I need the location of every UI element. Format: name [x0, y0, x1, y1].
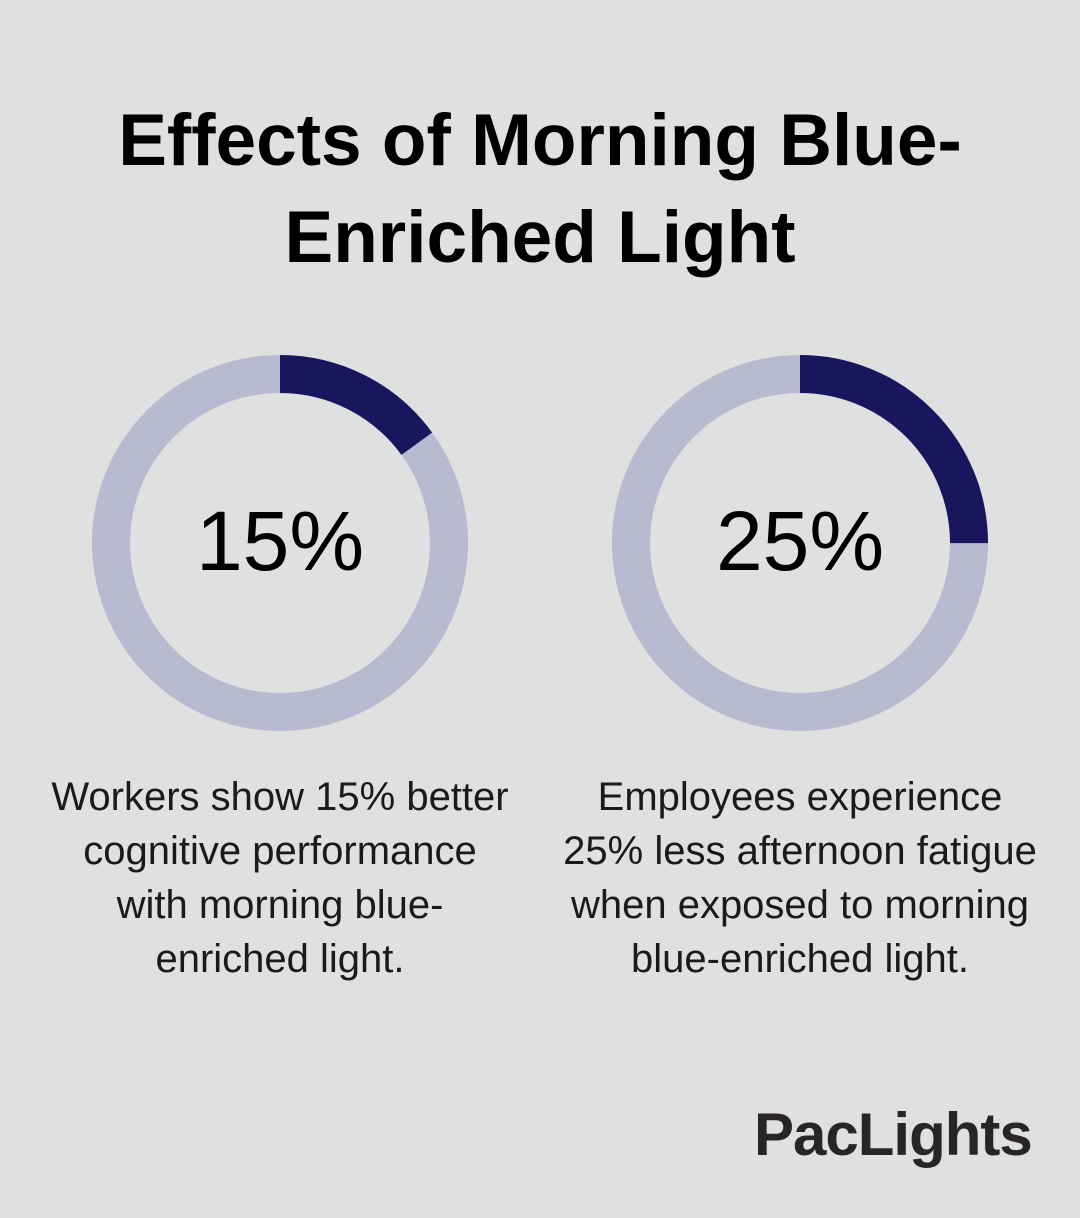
title: [118, 100, 962, 278]
text: right description: blue-enriched light.: [631, 937, 969, 981]
text: left description: enriched light.: [155, 937, 405, 981]
donut: 25%: [631, 374, 969, 712]
text: left description: Workers show 15% better: [51, 775, 509, 819]
text: right description: [563, 775, 1037, 981]
donut: 15%: [111, 374, 449, 712]
title: Enriched Light: [284, 197, 796, 278]
logo: PacLights: [754, 1101, 1032, 1168]
text: left description: [51, 775, 509, 981]
text: left description: with morning blue-: [117, 883, 443, 927]
donut: 25%: 25%: [716, 494, 884, 588]
text: right description: Employees experience: [598, 775, 1002, 819]
text: left description: cognitive performance: [83, 829, 477, 873]
donut: 15%: 15%: [196, 494, 364, 588]
title: Effects of Morning Blue-: [118, 100, 962, 181]
text: right description: 25% less afternoon fatigue: [563, 829, 1037, 873]
text: right description: when exposed to morning: [571, 883, 1029, 927]
